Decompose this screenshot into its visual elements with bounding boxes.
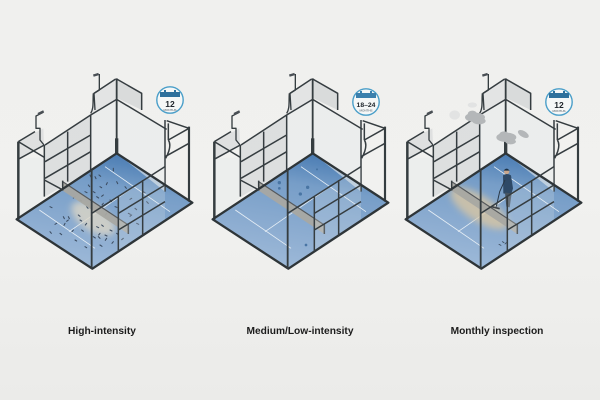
icon: 12 months badge: MONTHS: [164, 108, 176, 112]
court floor: [406, 153, 581, 269]
dust clouds: [465, 111, 530, 144]
debris remainder: [499, 242, 506, 245]
icon: 18-24 months badge: [353, 89, 379, 115]
court structure front: [17, 153, 192, 269]
scattered spots: [278, 168, 318, 246]
panel: medium/low-intensity court: [213, 74, 388, 269]
sand patch: [444, 180, 514, 237]
caption: monthly inspection: Monthly inspection: [451, 326, 543, 337]
panel: high-intensity court: [17, 74, 192, 269]
icon: 18-24 months badge: 18–24: [357, 102, 376, 109]
dust wisp: [449, 102, 477, 120]
icon: 18-24 months badge: MONTHS: [360, 108, 372, 112]
debris on floor: [50, 168, 148, 248]
icon: 12 months badge: [546, 89, 572, 115]
icon: 12 months badge: 12: [165, 99, 175, 109]
court structure back: [18, 74, 189, 219]
icon: worker with broom: [492, 169, 513, 209]
icon: 12 months badge: 12: [554, 100, 564, 110]
caption: high-intensity: High-intensity: [68, 326, 136, 337]
panel: monthly inspection court: [406, 74, 581, 269]
net: [63, 181, 128, 234]
net: [259, 181, 324, 234]
court structure front: [213, 153, 388, 269]
caption: medium/low-intensity: Medium/Low-intensity: [247, 326, 354, 337]
court structure back: [214, 74, 385, 219]
icon: 12 months badge: [157, 87, 183, 113]
court structure front: [406, 153, 581, 269]
court floor: [17, 153, 192, 269]
sand patch: [65, 194, 121, 243]
net: [452, 181, 517, 234]
court structure back: [407, 74, 578, 219]
icon: 12 months badge: MONTHS: [552, 109, 566, 113]
court floor: [213, 153, 388, 269]
